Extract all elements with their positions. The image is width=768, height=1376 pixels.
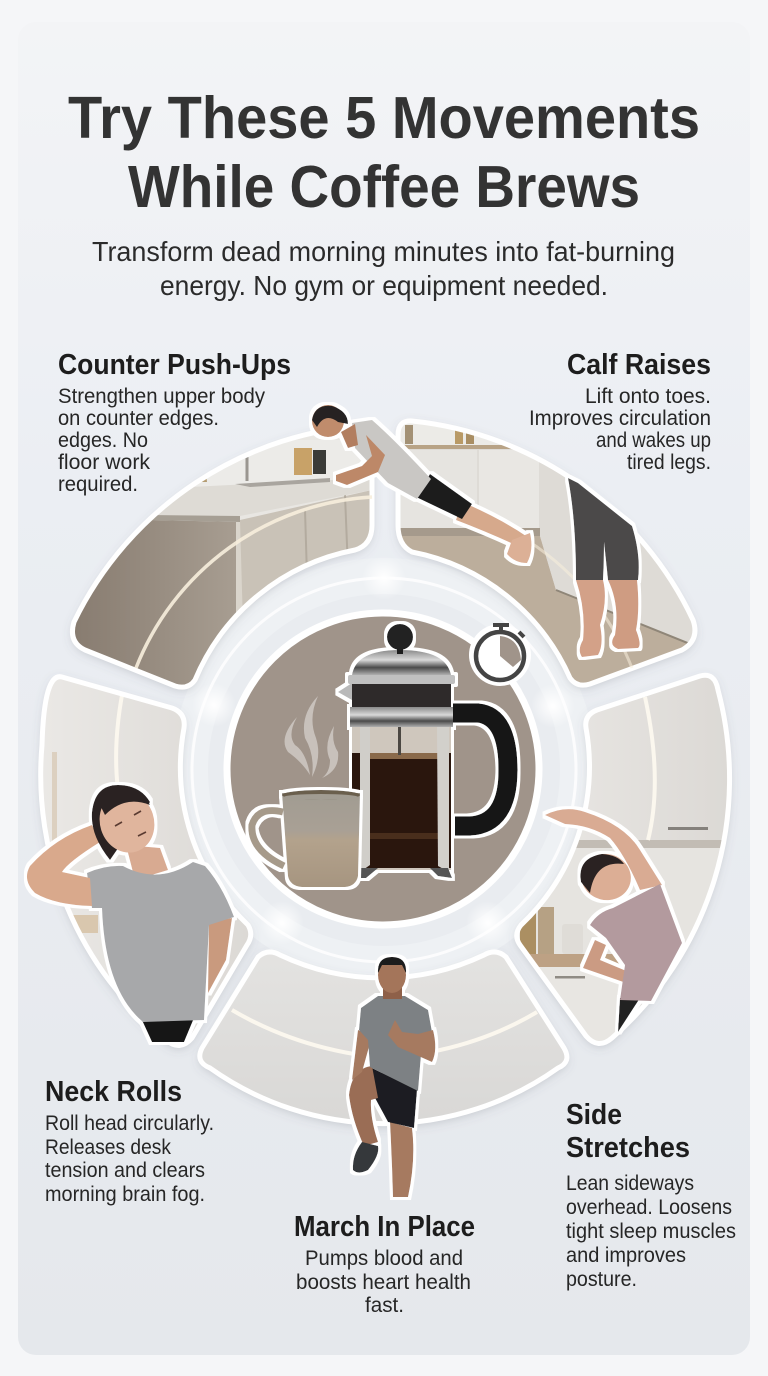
raised arm	[545, 809, 662, 890]
outline: neck rolls segment	[41, 677, 251, 1046]
press upper body	[352, 683, 451, 707]
figure: woman doing side stretch	[545, 809, 682, 1032]
subtitle	[92, 236, 675, 301]
press knob	[397, 640, 403, 654]
label: side stretches: posture.	[566, 1268, 637, 1291]
hair	[378, 957, 406, 973]
label: counter push-ups: Counter Push-Ups	[58, 349, 291, 381]
head	[312, 405, 344, 437]
figure: woman doing neck rolls	[27, 784, 234, 1042]
junction glows	[192, 556, 575, 945]
label: march in place: Pumps blood and	[305, 1247, 463, 1270]
icon: french press	[338, 624, 508, 878]
press spout	[338, 683, 352, 700]
label: side stretches: Stretches	[566, 1132, 690, 1164]
label: march in place: March In Place	[294, 1211, 475, 1243]
hair	[580, 854, 624, 893]
press handle	[453, 713, 508, 826]
left arm	[352, 1030, 372, 1080]
press chrome band	[350, 707, 453, 727]
icon: stopwatch	[469, 623, 531, 686]
shirt	[359, 996, 432, 1091]
figure: man marching	[349, 957, 435, 1197]
label: counter push-ups: floor work	[58, 451, 150, 474]
figure: man doing counter push-up	[312, 405, 531, 563]
title: Try These 5 Movements	[68, 85, 700, 151]
figure: legs doing calf raises	[568, 478, 640, 657]
centre disc	[227, 613, 539, 925]
leggings	[568, 478, 639, 580]
shirt	[352, 420, 431, 499]
label: counter push-ups: required.	[58, 473, 138, 496]
press lid	[352, 650, 451, 675]
label: neck rolls	[45, 1076, 214, 1206]
leg	[456, 502, 529, 548]
press feet	[354, 868, 452, 878]
closed eyes	[115, 811, 146, 836]
arm	[336, 435, 385, 485]
neck	[126, 845, 168, 880]
central ring backdrop	[172, 558, 596, 982]
title: While Coffee Brews	[128, 154, 640, 220]
label: march in place: boosts heart health	[296, 1271, 471, 1294]
outline: calf segment	[398, 421, 695, 685]
label: side stretches	[566, 1099, 736, 1291]
shorts	[416, 474, 472, 519]
outline: side stretches segment	[517, 675, 730, 1044]
label: side stretches: overhead. Loosens	[566, 1196, 732, 1219]
neck	[383, 985, 402, 999]
shirt	[590, 884, 682, 1001]
left calf	[576, 580, 605, 657]
title	[68, 85, 700, 220]
subtitle: Transform dead morning minutes into fat-burning	[92, 236, 675, 267]
right arm	[388, 1020, 435, 1062]
pants	[618, 998, 640, 1032]
label: calf raises: Improves circulation	[529, 407, 711, 430]
face	[92, 784, 162, 860]
glow arc: calf segment	[500, 525, 632, 668]
press coffee	[352, 753, 451, 868]
back arm	[208, 918, 232, 993]
subtitle: energy. No gym or equipment needed.	[160, 270, 608, 301]
foot	[507, 533, 531, 563]
standing leg	[390, 1122, 413, 1197]
head	[378, 957, 406, 993]
label: side stretches: Side	[566, 1099, 622, 1131]
outline: march segment	[200, 952, 567, 1124]
label: calf raises: Calf Raises	[567, 349, 711, 381]
label: calf raises: Lift onto toes.	[585, 385, 711, 408]
raised leg	[349, 1066, 378, 1146]
press frame strips	[360, 727, 370, 872]
shorts	[370, 1067, 417, 1128]
icon: steam	[285, 696, 338, 778]
hair	[312, 406, 348, 427]
raised arm	[27, 825, 100, 906]
label: side stretches: tight sleep muscles	[566, 1220, 736, 1243]
label: march in place: fast.	[365, 1294, 404, 1317]
label: neck rolls: Neck Rolls	[45, 1076, 182, 1108]
glow arc: counter segment	[136, 497, 372, 668]
label: side stretches: Lean sideways	[566, 1172, 694, 1195]
head	[576, 848, 636, 906]
label: counter push-ups	[58, 349, 291, 496]
label: neck rolls: Roll head circularly.	[45, 1112, 214, 1135]
panel: calf raises photo segment	[395, 415, 705, 700]
label: counter push-ups: edges. No	[58, 429, 148, 452]
label: counter push-ups: on counter edges.	[58, 407, 219, 430]
panel: march in place segment	[197, 954, 570, 1130]
label: march in place	[294, 1211, 475, 1317]
label: neck rolls: morning brain fog.	[45, 1183, 205, 1206]
label: neck rolls: Releases desk	[45, 1136, 171, 1159]
label: calf raises: and wakes up	[596, 429, 711, 452]
neck	[341, 424, 358, 448]
hair top	[100, 790, 150, 815]
pants	[141, 1018, 194, 1042]
lower arm	[583, 940, 636, 985]
panel: counter push-ups photo segment	[69, 436, 376, 694]
press plunger	[398, 727, 401, 755]
outline: counter segment	[72, 425, 372, 687]
press rim	[348, 675, 455, 684]
press glass	[352, 682, 451, 870]
panel: side stretches photo segment	[510, 670, 740, 1057]
hair	[92, 785, 150, 860]
label: neck rolls: tension and clears	[45, 1159, 205, 1182]
label: calf raises: tired legs.	[627, 451, 711, 474]
shoe	[353, 1142, 378, 1172]
shirt	[87, 862, 234, 1022]
label: calf raises	[529, 349, 711, 474]
label: counter push-ups: Strengthen upper body	[58, 385, 265, 408]
icon: mug	[252, 790, 360, 887]
right calf	[608, 580, 640, 649]
label: side stretches: and improves	[566, 1244, 686, 1267]
panel: neck rolls segment	[30, 670, 260, 1055]
